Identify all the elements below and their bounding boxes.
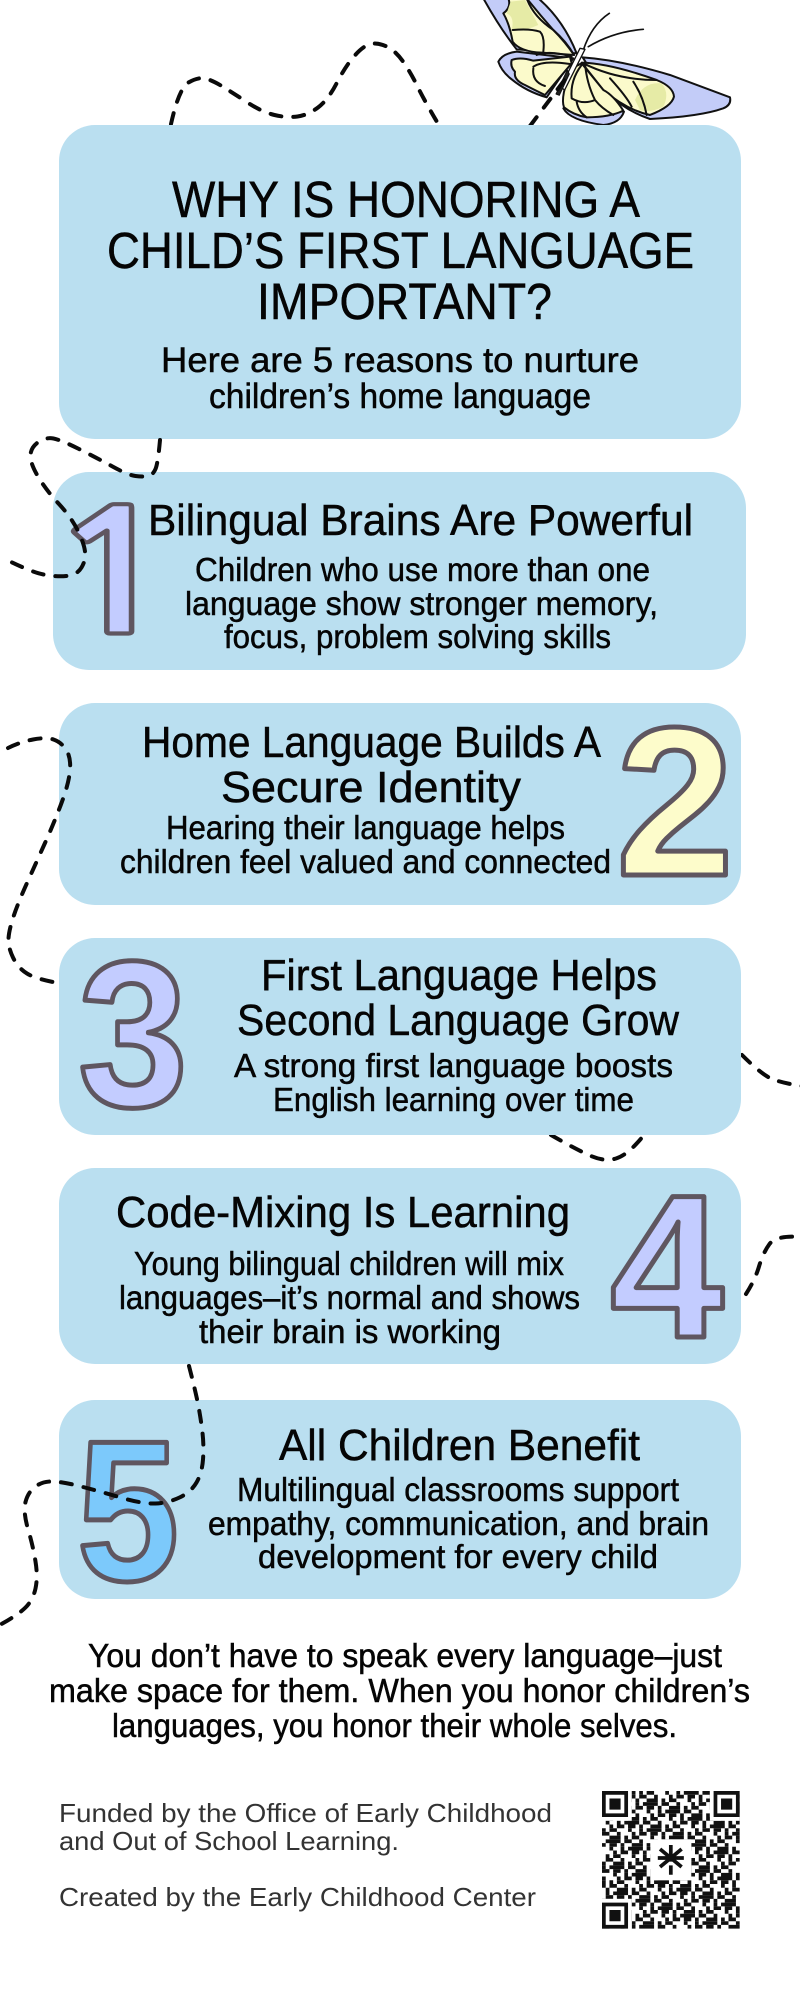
heading: reason 3: Second Language Grow [237,996,679,1045]
dashed flight path: top wave [171,44,440,127]
icon: butterfly [483,0,730,125]
dashed flight path: loop around numeral 1 [5,438,160,576]
footer credits: Funded by the Office of Early Childhood [59,1798,552,1828]
panel: reason 3 [59,917,741,1150]
numeral 4: 4 [610,1153,724,1381]
heading: reason 3 [237,951,679,1045]
numeral 1: 1 [44,490,184,659]
dashed flight path: below panel 3 [551,1135,644,1160]
heading: main title: CHILD’S FIRST LANGUAGE [107,222,694,279]
body: reason 2 [120,809,611,880]
heading: reason 2 [142,718,602,812]
heading: reason 2: Secure Identity [221,763,521,812]
panel: reason 5 [59,1399,741,1623]
heading: reason 2: Home Language Builds A [142,718,602,767]
body: reason 3 [234,1047,673,1118]
body: reason 4: languages–it’s normal and shows [119,1279,580,1316]
body: reason 4 [119,1245,580,1350]
dashed flight path: butterfly tail [530,78,566,126]
closing message: make space for them. When you honor children’s [49,1672,750,1709]
heading: reason 1: Bilingual Brains Are Powerful [148,496,693,545]
numeral 2: 2 [616,683,734,920]
body: reason 4: their brain is working [199,1313,501,1350]
heading: main title: IMPORTANT? [257,273,552,330]
subheading: Here are 5 reasons to nurture [161,341,639,380]
panel: reason 4 [59,1153,741,1381]
body: reason 5 [208,1471,709,1575]
closing message: You don’t have to speak every language–just [88,1637,722,1674]
body: reason 2: Hearing their language helps [166,809,565,846]
footer credits: Created by the Early Childhood Center [59,1882,536,1912]
panel: reason 1 [44,472,746,670]
body: reason 1: Children who use more than one [195,551,650,588]
body: reason 4: Young bilingual children will mix [134,1245,564,1282]
heading: main title [107,171,694,330]
numeral 3: 3 [78,917,188,1150]
subheading [161,341,639,416]
heading: reason 4: Code-Mixing Is Learning [116,1188,570,1237]
body: reason 3: A strong first language boosts [234,1047,673,1084]
heading: reason 5: All Children Benefit [279,1421,640,1470]
body: reason 2: children feel valued and connected [120,843,611,880]
dashed flight path: left of panels 2 and 3 [8,738,70,983]
dashed flight path: across numeral 5 [0,1366,203,1626]
heading: reason 3: First Language Helps [261,951,657,1000]
body: reason 5: empathy, communication, and brain [208,1505,709,1542]
dashed flight path: right of panel 4 [746,1237,800,1294]
subheading: children’s home language [209,377,591,416]
footer credits [59,1798,552,1912]
body: reason 1: focus, problem solving skills [224,618,611,655]
QR code [602,1791,740,1929]
panel: reason 2 [59,683,741,920]
body: reason 1 [185,551,658,655]
body: reason 1: language show stronger memory, [185,585,658,622]
closing message [49,1637,750,1744]
heading: main title: WHY IS HONORING A [172,171,640,228]
closing message: languages, you honor their whole selves. [112,1707,677,1744]
numeral 5: 5 [77,1399,179,1623]
body: reason 5: Multilingual classrooms support [237,1471,679,1508]
body: reason 3: English learning over time [273,1081,634,1118]
body: reason 5: development for every child [258,1538,658,1575]
dashed flight path: right of panel 3 [742,1055,800,1086]
footer credits: and Out of School Learning. [59,1826,399,1856]
panel: title header [59,125,741,439]
